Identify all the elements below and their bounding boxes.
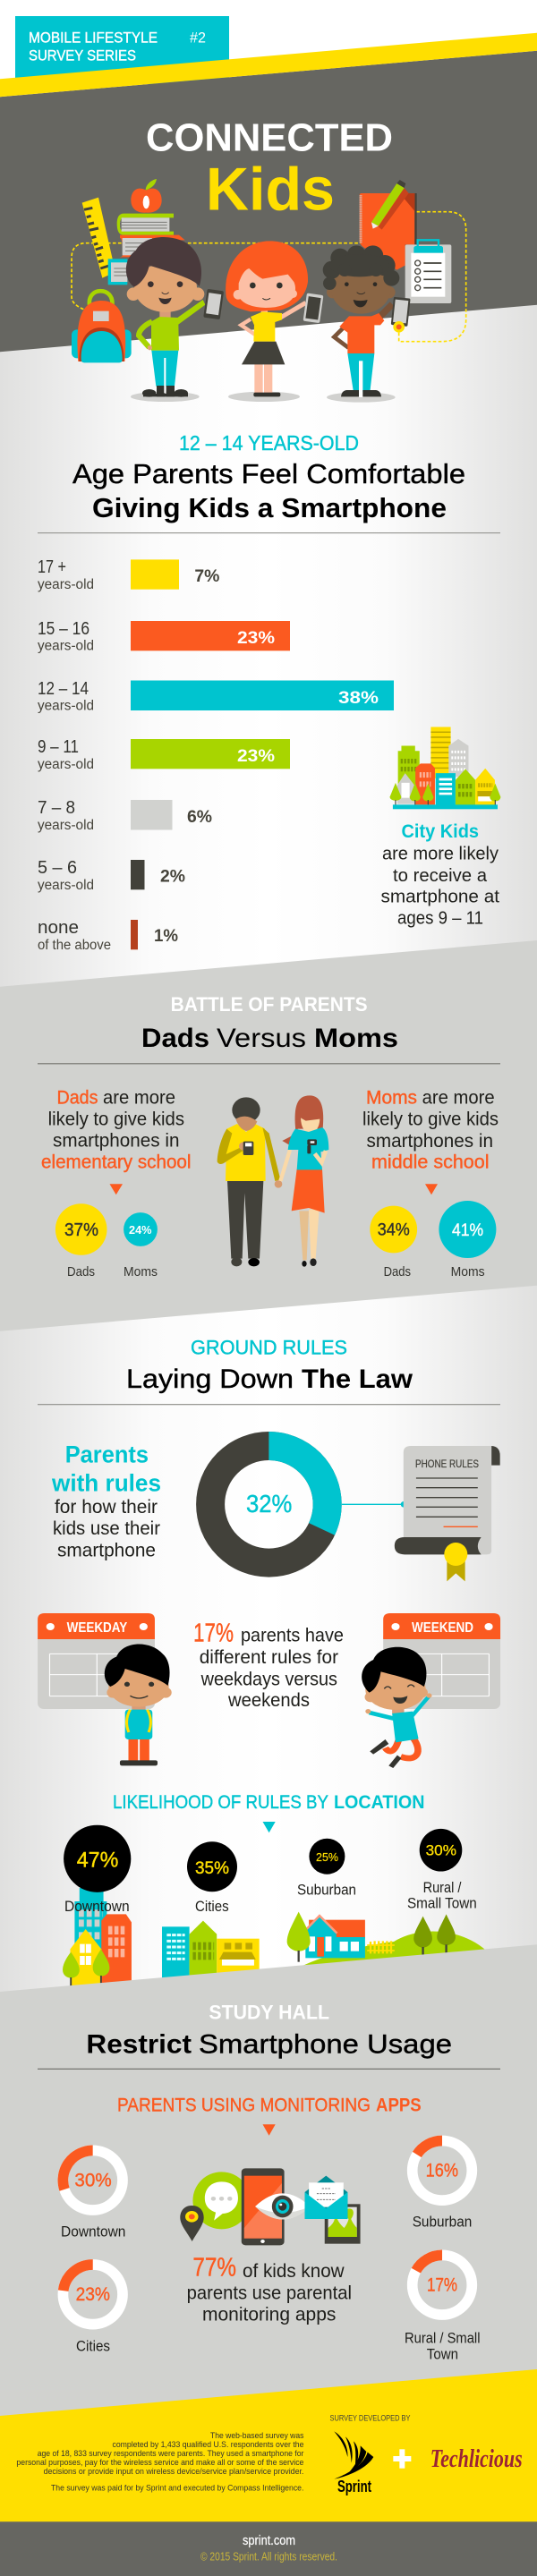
text block: dads: are more (103, 1087, 175, 1108)
bubble chart: elementary school: Moms (124, 1264, 158, 1279)
bar: none: 1% (154, 927, 178, 946)
heading: dads versus moms: Moms (314, 1024, 398, 1053)
bubble: rural: 30% (426, 1842, 456, 1859)
arrow: dads (109, 1184, 123, 1194)
donut: downtown 30%: Downtown (61, 2223, 125, 2240)
bar: 5-6: 2% (160, 868, 185, 886)
text block: 77% (187, 2254, 352, 2325)
title: Kids (206, 155, 335, 223)
callout: city kids: to receive a (393, 866, 488, 886)
panel: battle of parents background (0, 940, 537, 1331)
footer bar: © 2015 Sprint. All rights reserved. (200, 2551, 337, 2563)
bar: 7-8: years-old (38, 818, 94, 833)
bubble chart: elementary school: 24% (129, 1223, 152, 1237)
bar: none: of the above (38, 938, 111, 953)
heading: dads versus moms: Versus (217, 1024, 306, 1053)
series tag: MOBILE LIFESTYLE (29, 29, 158, 46)
subheading: parents using monitoring apps: APPS (376, 2095, 422, 2115)
illustration: jumping kid (362, 1647, 432, 1768)
donut: cities 23% (59, 2261, 126, 2354)
calendar: weekend (383, 1613, 500, 1709)
arrow: location (263, 1822, 276, 1832)
bubble chart: elementary school: 37% (64, 1220, 98, 1240)
text block: 77%: 77% (192, 2254, 236, 2283)
text block: 17% parents: different rules for (200, 1647, 338, 1668)
donut: suburban 16% (401, 2130, 483, 2231)
heading: restrict smartphone usage: Smartphone Usage (199, 2029, 452, 2059)
bubble chart: rules by location (64, 1825, 477, 1915)
illustration: girl, boy, notebook and clipboard (226, 180, 466, 403)
text block: 17% parents: parents have (241, 1626, 344, 1646)
methodology text: age of 18, 833 survey respondents were parents. They used a smartphone for (38, 2448, 303, 2458)
logos: sprint and techlicious: Sprint (337, 2478, 371, 2495)
bubble: downtown (64, 1825, 131, 1915)
icon: phone rules scroll: PHONE RULES (415, 1459, 479, 1470)
donut chart: 32%: 32% (246, 1490, 292, 1518)
heading: ground rules: The Law (302, 1365, 413, 1394)
methodology text: The survey was paid for by Sprint and executed by Compass Intelligence. (51, 2482, 303, 2492)
bubble chart: middle school (370, 1201, 496, 1279)
calendar: weekend: WEEKEND (412, 1620, 473, 1636)
bubble: downtown: 47% (77, 1849, 118, 1873)
text block: 17% parents: weekdays versus (200, 1669, 337, 1689)
heading: dads versus moms: Dads (141, 1024, 209, 1053)
methodology text: The web-based survey was (210, 2430, 304, 2440)
bar: 17+: 17 + (38, 557, 66, 577)
illustration: school items and boy with phone (72, 179, 271, 402)
bubble: cities (187, 1841, 237, 1915)
text block: dads: smartphones in (53, 1131, 179, 1152)
subheading: likelihood by location: LIKELIHOOD OF RULES BY (113, 1792, 328, 1813)
heading: restrict smartphone usage: Restrict (86, 2029, 192, 2059)
text block: 77%: of kids know (243, 2261, 345, 2282)
series tag: SURVEY SERIES (29, 47, 136, 64)
calendar: weekday (38, 1613, 155, 1709)
bar: 5-6 (38, 858, 185, 893)
bar: 17+ (38, 557, 220, 592)
bubble: downtown: Downtown (64, 1899, 130, 1915)
bubble chart: elementary school (55, 1203, 158, 1279)
heading: ground rules: Laying Down (126, 1365, 294, 1394)
subheading: parents using monitoring apps: PARENTS USING MONITORING (117, 2095, 371, 2115)
illustration: kid with backpack (105, 1644, 172, 1765)
donut: rural 17%: Town (427, 2347, 458, 2363)
callout: city kids: City Kids (401, 821, 479, 842)
methodology text: completed by 1,433 qualified U.S. respondents over the (113, 2439, 303, 2449)
panel: study hall background (0, 1944, 537, 2418)
footer bar: sprint.com (243, 2534, 295, 2548)
bar: 5-6: years-old (38, 878, 94, 893)
text block: parents with rules (51, 1441, 161, 1560)
text block: parents with rules: kids use their (53, 1518, 160, 1539)
section heading: age: Giving Kids a Smartphone (92, 492, 447, 523)
text block: moms: likely to give kids (362, 1109, 499, 1130)
donut: rural 17%: Rural / Small (405, 2331, 480, 2347)
bubble chart: elementary school: Dads (67, 1264, 95, 1279)
text block: parents with rules: smartphone (57, 1540, 156, 1560)
bar: 9-11: years-old (38, 757, 94, 772)
bubble chart: middle school: 41% (452, 1221, 483, 1240)
section heading: age: 12 – 14 YEARS-OLD (179, 431, 359, 455)
bar: 15-16 (38, 619, 290, 653)
text block: dads: Dads (57, 1087, 98, 1108)
bar: 9-11 (38, 737, 290, 772)
bar: 17+: years-old (38, 577, 94, 592)
section heading: age: Age Parents Feel Comfortable (72, 458, 465, 489)
bubble: cities: Cities (195, 1899, 229, 1915)
illustration: suburban house and hills (281, 1912, 486, 1977)
text block: 17% parents (193, 1619, 344, 1711)
text block: 17% parents: 17% (193, 1619, 234, 1647)
bar: 12-14: 12 – 14 (38, 679, 89, 699)
bar: 7-8: 6% (187, 808, 212, 827)
donut: suburban 16%: 16% (426, 2161, 458, 2181)
bubble: rural: Rural / (423, 1880, 462, 1896)
bar: 12-14: years-old (38, 698, 94, 714)
callout: city kids (381, 821, 499, 929)
donut: cities 23%: Cities (76, 2338, 110, 2354)
heading: restrict smartphone usage: STUDY HALL (209, 2002, 329, 2024)
series tag: #2 (190, 29, 206, 46)
heading: dads versus moms: BATTLE OF PARENTS (171, 993, 368, 1016)
donut: rural 17%: 17% (427, 2275, 457, 2296)
arrow: apps (263, 2124, 276, 2136)
title: CONNECTED (146, 115, 393, 159)
methodology text (16, 2430, 304, 2492)
callout: city kids: are more likely (382, 845, 499, 864)
bubble: rural: Small Town (407, 1896, 477, 1912)
bar: 15-16: 15 – 16 (38, 619, 90, 639)
text block: dads: elementary school (41, 1152, 192, 1172)
bar: 15-16: 23% (237, 629, 275, 648)
bar: none: none (38, 918, 79, 938)
callout: city kids: smartphone at (381, 888, 499, 907)
illustration: dad and mom (217, 1095, 328, 1267)
footer bar (0, 2521, 537, 2576)
text block: moms: are more (422, 1088, 495, 1109)
heading: restrict smartphone usage (38, 2002, 500, 2070)
bubble: suburban: 25% (316, 1850, 338, 1864)
bar: 12-14 (38, 679, 394, 714)
bar: none (38, 918, 178, 953)
arrow: moms (425, 1184, 438, 1194)
hero band: yellow stripe (0, 33, 537, 97)
text block: moms: smartphones in (367, 1131, 493, 1152)
bubble chart: middle school: 34% (378, 1221, 410, 1240)
bar: 9-11: 9 – 11 (38, 737, 79, 757)
bar: 7-8: 7 – 8 (38, 798, 75, 818)
heading: dads versus moms (38, 993, 500, 1065)
donut: downtown 30% (55, 2143, 131, 2240)
text block: moms (362, 1088, 499, 1173)
methodology text: personal purposes, pay for the wireless service and make all or some of the service (16, 2457, 303, 2467)
illustration: monitoring apps (180, 2168, 361, 2245)
illustration: downtown buildings (63, 1888, 132, 2002)
bubble chart: middle school: Dads (384, 1264, 411, 1279)
bubble: suburban (297, 1839, 356, 1898)
title (146, 115, 393, 223)
bubble: suburban: Suburban (297, 1882, 356, 1898)
logos: sprint and techlicious (329, 2414, 523, 2495)
calendar: weekday: WEEKDAY (67, 1620, 128, 1636)
icon: city (389, 727, 500, 809)
illustration: city buildings (162, 1921, 260, 1986)
text block: parents with rules: with rules (51, 1470, 161, 1497)
text block: parents with rules: for how their (55, 1497, 158, 1518)
text block: dads: likely to give kids (48, 1109, 184, 1129)
bubble chart: middle school: Moms (451, 1264, 485, 1279)
heading: ground rules: GROUND RULES (191, 1337, 347, 1359)
donut: cities 23%: 23% (76, 2284, 110, 2305)
callout: city kids: ages 9 – 11 (397, 909, 483, 929)
donut: downtown 30%: 30% (74, 2170, 112, 2190)
bar chart: age comfortable (38, 557, 394, 953)
text block: 17% parents: weekends (227, 1690, 310, 1711)
donut chart: 32% (210, 1446, 406, 1563)
bar: 9-11: 23% (237, 747, 275, 766)
bar: 7-8 (38, 798, 212, 833)
bar: 17+: 7% (194, 567, 220, 586)
methodology text: decisions or provide input on wireless device/service plan/service provider. (44, 2466, 303, 2476)
bubble: cities: 35% (195, 1859, 229, 1878)
text block: moms: Moms (366, 1088, 417, 1109)
text block: dads (41, 1087, 192, 1172)
bar: 12-14: 38% (338, 689, 379, 708)
bar: 15-16: years-old (38, 639, 94, 653)
section heading: age (38, 431, 500, 533)
heading: ground rules (38, 1337, 500, 1405)
series tag (15, 16, 229, 84)
icon: phone rules scroll (395, 1446, 500, 1581)
text block: 77%: monitoring apps (202, 2304, 336, 2325)
logos: sprint and techlicious: SURVEY DEVELOPED BY (329, 2414, 411, 2424)
bubble: rural (407, 1829, 477, 1912)
bar: 5-6: 5 – 6 (38, 858, 77, 878)
panel: footer yellow (0, 2369, 537, 2522)
text block: 77%: parents use parental (187, 2283, 352, 2303)
hero band: dark background (0, 51, 537, 352)
subheading: likelihood by location: LOCATION (334, 1792, 424, 1813)
donut: rural 17% (402, 2244, 482, 2363)
text block: moms: middle school (371, 1152, 489, 1173)
text block: parents with rules: Parents (65, 1441, 149, 1467)
donut: suburban 16%: Suburban (413, 2215, 472, 2231)
